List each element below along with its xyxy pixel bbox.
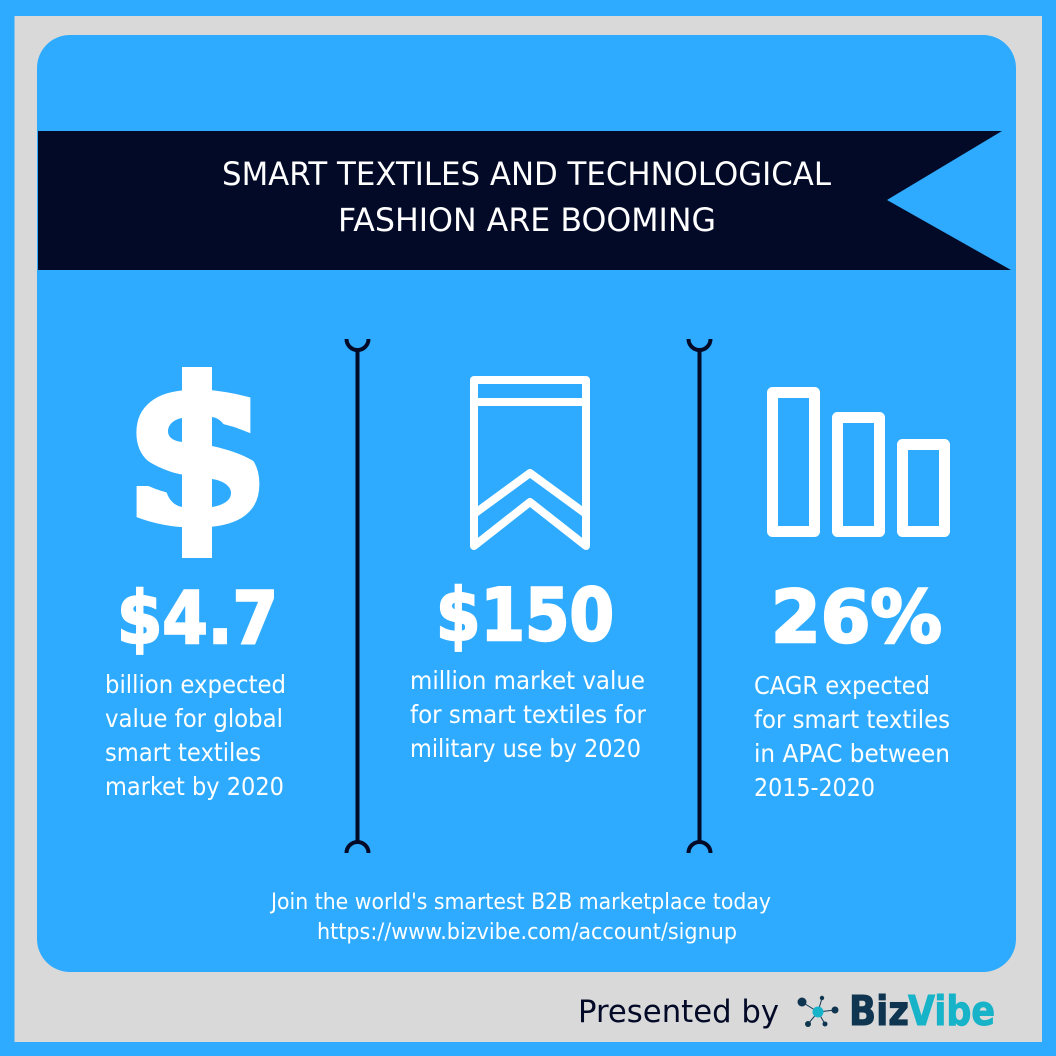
text: global market description: billion expected <box>105 670 286 699</box>
text: CAGR description <box>754 671 950 802</box>
text: global market description: smart textiles <box>105 738 261 767</box>
divider: right <box>688 339 710 853</box>
text: CAGR description: 2015-2020 <box>754 773 875 802</box>
call to action <box>269 890 771 945</box>
wordmark: Vibe <box>908 987 995 1035</box>
text: global market description: value for global <box>105 704 283 733</box>
divider: left <box>346 339 368 853</box>
icon: dollar sign: $ <box>126 340 268 570</box>
text: military description: military use by 2020 <box>410 734 641 763</box>
call to action: Join the world's smartest B2B marketplace today <box>269 890 771 915</box>
stat: 26%: 26% <box>771 575 942 659</box>
title <box>222 155 831 239</box>
text: CAGR description: in APAC between <box>754 739 950 768</box>
text: global market description <box>105 670 286 801</box>
text: military description <box>410 666 647 763</box>
call to action: https://www.bizvibe.com/account/signup <box>317 920 737 945</box>
icon: descending bars <box>772 392 944 532</box>
presented by label: Presented by <box>578 994 779 1030</box>
text: global market description: market by 2020 <box>105 772 284 801</box>
icon: bookmark ribbon <box>474 380 586 546</box>
text: CAGR description: CAGR expected <box>754 671 930 700</box>
text: CAGR description: for smart textiles <box>754 705 950 734</box>
title banner <box>38 131 1011 270</box>
stat: $4.7: $4.7 <box>117 576 278 660</box>
text: military description: million market value <box>410 666 645 695</box>
text: military description: for smart textiles for <box>410 700 647 729</box>
wordmark <box>849 987 995 1035</box>
title: FASHION ARE BOOMING <box>338 201 716 239</box>
panel: global market value <box>105 340 286 801</box>
wordmark: Biz <box>849 987 909 1035</box>
logo: BizVibe <box>798 987 995 1035</box>
panel: APAC growth <box>754 392 950 802</box>
stat: $150: $150 <box>436 573 614 657</box>
icon: network nodes <box>798 996 838 1027</box>
title: SMART TEXTILES AND TECHNOLOGICAL <box>222 155 831 193</box>
panel: military use <box>410 380 647 763</box>
